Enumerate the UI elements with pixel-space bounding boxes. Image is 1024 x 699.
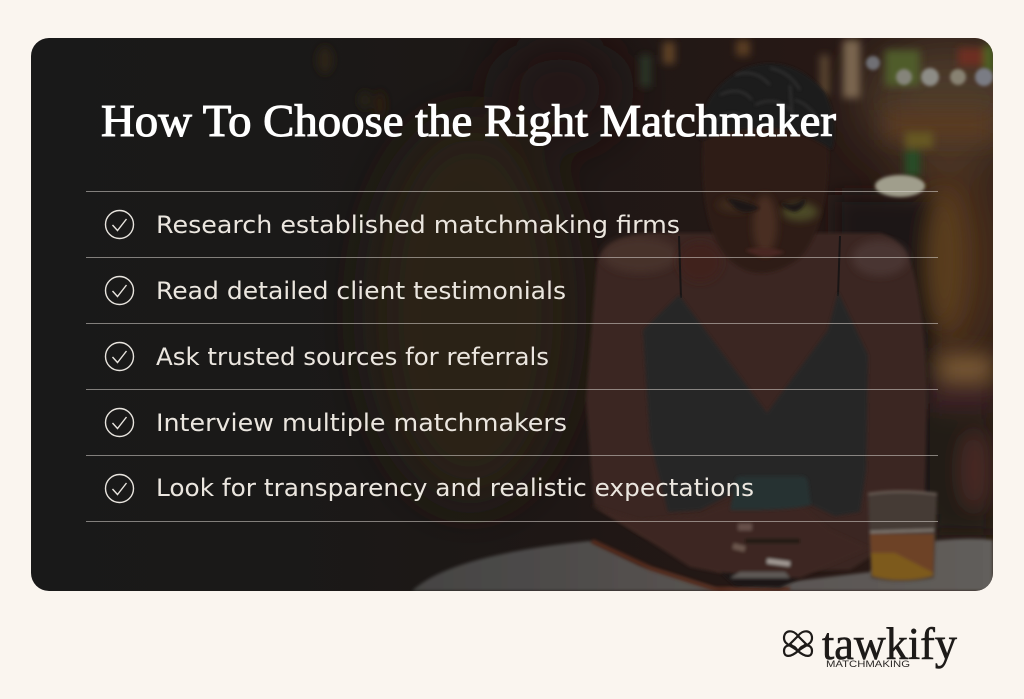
- photo: table edge reflection: [592, 541, 790, 589]
- photo: woman's face and hair: [700, 63, 835, 273]
- item text: transparency: Look for transparency and realistic expectations: [156, 474, 754, 502]
- icon: check circle: [106, 342, 134, 370]
- photo: whisky glass: [868, 492, 937, 582]
- icon: check circle: [106, 210, 134, 238]
- photo: table top: [412, 539, 993, 591]
- icon: check circle: [106, 276, 134, 304]
- photo: phone: [730, 476, 811, 510]
- logo subtitle: MATCHMAKING: [826, 659, 910, 670]
- item text: referrals: Ask trusted sources for referrals: [156, 343, 549, 371]
- photo: woman's dress: [643, 292, 868, 516]
- item 3: [106, 342, 549, 371]
- item 4: [106, 408, 567, 437]
- item 2: [106, 276, 566, 305]
- icon: interlocked hearts: [784, 631, 812, 656]
- photo: woman looking at her phone in a bar: [31, 38, 1024, 591]
- logo: tawkify matchmaking: [784, 619, 957, 670]
- photo: woman's shoulders and arms: [586, 233, 927, 572]
- checklist: [86, 192, 938, 522]
- item text: testimonials: Read detailed client testimonials: [156, 277, 566, 305]
- item 5: [106, 474, 754, 502]
- logo wordmark: tawkify: [822, 619, 957, 669]
- icon: check circle: [106, 408, 134, 436]
- item text: research: Research established matchmaking firms: [156, 211, 680, 239]
- item 1: [106, 210, 680, 239]
- divider lines: [86, 192, 938, 522]
- panel: dark photo card: [31, 38, 1024, 591]
- item text: interview: Interview multiple matchmakers: [156, 409, 567, 437]
- title: How To Choose the Right Matchmaker: [101, 95, 836, 146]
- icon: check circle: [106, 474, 134, 502]
- photo: hands: [594, 507, 816, 590]
